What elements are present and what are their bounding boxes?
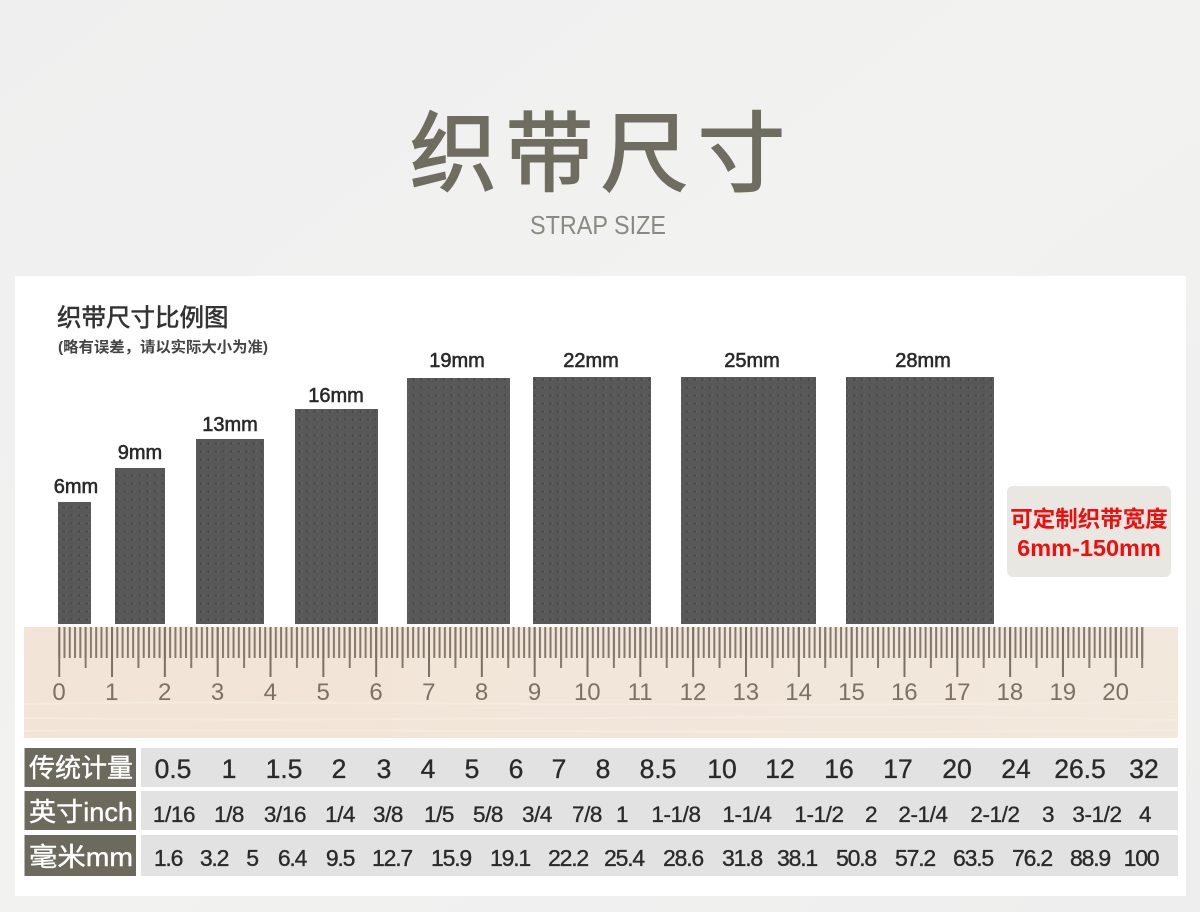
table row: traditional measure: 8.5 xyxy=(640,754,676,784)
ruler numbers: 0 xyxy=(52,679,66,706)
table row: millimetre: 22.2 xyxy=(548,845,588,871)
ruler numbers: 8 xyxy=(475,679,488,706)
table row: inch: 英寸inch xyxy=(29,797,133,827)
ruler numbers: 16 xyxy=(891,679,918,706)
table row: millimetre: 63.5 xyxy=(953,845,993,871)
strap 6mm: 6mm xyxy=(54,476,98,498)
table row: millimetre: 毫米mm xyxy=(29,842,133,872)
ruler numbers xyxy=(52,679,1129,706)
table row: millimetre: 57.2 xyxy=(895,845,935,871)
table row: millimetre: 31.8 xyxy=(722,845,762,871)
table row: inch: 1/4 xyxy=(325,802,355,827)
table row: inch: 1/5 xyxy=(424,802,454,827)
table row: inch: 1-1/8 xyxy=(651,802,701,827)
ruler numbers: 18 xyxy=(997,679,1023,706)
table row: traditional measure: 0.5 xyxy=(155,754,191,784)
strap 9mm xyxy=(115,442,165,624)
table row: traditional measure: 1.5 xyxy=(266,754,302,784)
strap 25mm: 25mm xyxy=(724,350,780,372)
table row: inch: 1/8 xyxy=(214,802,244,827)
table row: traditional measure: 1 xyxy=(222,754,236,784)
table row: traditional measure: 6 xyxy=(509,754,523,784)
table row: traditional measure: 16 xyxy=(824,754,854,784)
table row: inch: 1-1/2 xyxy=(794,802,844,827)
ruler numbers: 2 xyxy=(158,679,171,706)
table row: traditional measure: 7 xyxy=(552,754,566,784)
table row: inch: 3 xyxy=(1042,802,1054,827)
title: 寸 xyxy=(698,106,785,203)
table row: millimetre: 28.6 xyxy=(663,845,703,871)
table row: millimetre: 100 xyxy=(1124,845,1159,871)
table row: traditional measure: 5 xyxy=(465,754,479,784)
table row: traditional measure: 20 xyxy=(942,754,972,784)
table row: millimetre: 19.1 xyxy=(490,845,530,871)
table row: inch: 4 xyxy=(1139,802,1151,827)
table row: millimetre xyxy=(24,835,1178,876)
table row: millimetre: 38.1 xyxy=(777,845,817,871)
table row: inch xyxy=(24,791,1178,830)
ruler numbers: 9 xyxy=(528,679,541,706)
table row: millimetre: 9.5 xyxy=(326,845,355,871)
ruler numbers: 19 xyxy=(1049,679,1076,706)
strap 25mm xyxy=(681,350,816,624)
table row: inch: 2 xyxy=(865,802,877,827)
ruler numbers: 14 xyxy=(785,679,812,706)
callout: custom width: 可定制织带宽度 xyxy=(1010,506,1168,532)
strap 22mm: 22mm xyxy=(563,350,619,372)
callout: custom width: 6mm-150mm xyxy=(1017,535,1161,561)
strap 28mm xyxy=(846,350,994,624)
table row: traditional measure: 10 xyxy=(707,754,737,784)
ruler numbers: 11 xyxy=(628,679,653,706)
strap 19mm xyxy=(407,350,510,624)
table row: inch: 1 xyxy=(616,802,628,827)
panel: strap size chart xyxy=(15,276,1186,896)
title: 带 xyxy=(506,106,593,203)
table row: millimetre: 76.2 xyxy=(1012,845,1052,871)
title: 织 xyxy=(410,106,497,203)
ruler numbers: 7 xyxy=(422,679,435,706)
ruler numbers: 13 xyxy=(732,679,759,706)
table row: traditional measure: 2 xyxy=(332,754,346,784)
strap 16mm xyxy=(295,385,378,624)
ruler numbers: 12 xyxy=(680,679,706,706)
table row: inch: 2-1/2 xyxy=(970,802,1020,827)
strap 22mm xyxy=(533,350,651,624)
strap 9mm: 9mm xyxy=(118,442,162,464)
table row: traditional measure xyxy=(24,748,1178,787)
ruler xyxy=(24,627,1178,738)
strap 28mm: 28mm xyxy=(895,350,951,372)
table row: traditional measure: 17 xyxy=(883,754,913,784)
table row: millimetre: 25.4 xyxy=(604,845,645,871)
table row: inch: 3-1/2 xyxy=(1072,802,1122,827)
chart heading: 织带尺寸比例图 xyxy=(57,304,228,332)
table row: traditional measure: 传统计量 xyxy=(29,753,133,783)
table row: inch: 3/8 xyxy=(373,802,403,827)
table row: traditional measure: 8 xyxy=(596,754,610,784)
ruler numbers: 17 xyxy=(944,679,970,706)
table row: inch: 7/8 xyxy=(572,802,602,827)
table row: traditional measure: 26.5 xyxy=(1054,754,1106,784)
ruler numbers: 20 xyxy=(1102,679,1129,706)
ruler numbers: 6 xyxy=(369,679,383,706)
ruler numbers: 4 xyxy=(264,679,277,706)
callout: custom width xyxy=(1007,486,1171,577)
table row: inch: 2-1/4 xyxy=(898,802,948,827)
ruler numbers: 10 xyxy=(574,679,601,706)
table row: millimetre: 12.7 xyxy=(372,845,412,871)
table row: millimetre: 3.2 xyxy=(200,845,229,871)
table row: inch: 3/16 xyxy=(264,802,306,827)
table row: millimetre: 1.6 xyxy=(154,845,183,871)
table row: inch: 1-1/4 xyxy=(722,802,772,827)
ruler numbers: 1 xyxy=(105,679,118,706)
table row: inch: 1/16 xyxy=(153,802,195,827)
strap 6mm xyxy=(54,476,98,624)
table row: millimetre: 15.9 xyxy=(431,845,471,871)
table row: millimetre: 6.4 xyxy=(278,845,308,871)
table row: traditional measure: 32 xyxy=(1129,754,1159,784)
table row: millimetre: 88.9 xyxy=(1070,845,1110,871)
ruler numbers: 3 xyxy=(211,679,224,706)
table row: inch: 3/4 xyxy=(522,802,552,827)
table row: millimetre: 5 xyxy=(246,845,258,871)
ruler numbers: 15 xyxy=(838,679,865,706)
table row: traditional measure: 4 xyxy=(421,754,435,784)
table row: millimetre: 50.8 xyxy=(836,845,876,871)
strap 13mm: 13mm xyxy=(202,414,258,436)
strap 16mm: 16mm xyxy=(308,385,364,407)
strap 13mm xyxy=(196,414,264,624)
table row: traditional measure: 3 xyxy=(377,754,391,784)
subtitle: STRAP SIZE: STRAP SIZE xyxy=(530,210,666,240)
table row: inch: 5/8 xyxy=(473,802,503,827)
title xyxy=(410,106,785,203)
strap 19mm: 19mm xyxy=(429,350,485,372)
table row: traditional measure: 24 xyxy=(1001,754,1031,784)
table row: traditional measure: 12 xyxy=(765,754,795,784)
chart note: (略有误差，请以实际大小为准) xyxy=(58,338,268,356)
ruler numbers: 5 xyxy=(317,679,330,706)
title: 尺 xyxy=(601,106,688,203)
